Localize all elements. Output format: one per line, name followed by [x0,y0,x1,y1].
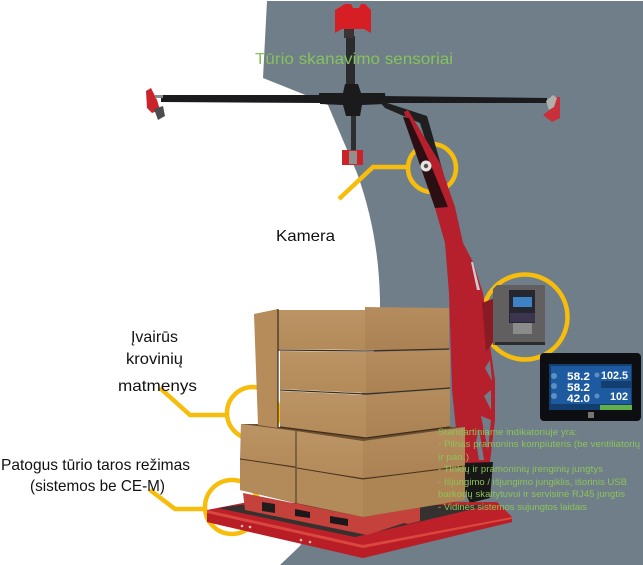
text block: indicator features: - Tinklų ir pramoninių įrenginių jungtys [438,464,603,475]
sensor frame [146,4,560,165]
text block: indicator features [438,427,640,513]
red column [404,110,495,468]
callout: load dimensions ring and leader [160,387,279,439]
text block: indicator features: - Išjungimo / išjungimo jungiklis, išorinis USB [438,477,627,488]
indicator cabinet [493,285,545,345]
callout: camera ring and leader [339,144,456,199]
screen readings: 102.5 [601,370,628,382]
screen readings: 58.2 [567,382,590,394]
callout: tare mode ring and leader [150,480,259,534]
label: tare mode: (sistemos be CE-M) [30,478,165,495]
lattice bracket [482,298,495,352]
lattice openings [476,360,492,460]
text block: indicator features: Standartiniame indikatoriuje yra: [438,427,577,438]
mast arms [161,36,547,150]
callout: indicator ring [482,274,568,360]
stacked cartons [240,307,465,517]
icon: left sensor [146,88,165,120]
label: load dimensions: matmenys [118,378,197,395]
grey background shape [263,1,643,565]
weighing platform [207,502,512,558]
icon: right sensor [543,95,560,122]
light slot [471,262,480,290]
touchscreen tablet [540,353,641,421]
label: tare mode [1,457,190,495]
pallet [243,493,420,535]
red column and arm [378,100,495,503]
screen readings: 58.2 [567,371,590,383]
label: load dimensions [118,329,197,395]
text block: indicator features: - Pilnas pramonins kompiuteris (be ventiliatorių [438,439,640,450]
label: tare mode: Patogus tūrio taros režimas [1,457,190,474]
text block: indicator features: barkodų skaitytuvui ir servisinė RJ45 jungtis [438,489,625,500]
lower carton stack [240,424,465,517]
heading: scanning sensors: Tūrio skanavimo sensoriai [255,51,453,68]
icon: camera lens [420,160,432,172]
column base [463,462,493,503]
screen readings: 102 [610,391,628,403]
screen readings [567,370,628,405]
black bracket [378,100,443,176]
label: load dimensions: krovinių [126,351,183,368]
carton backing [240,424,465,517]
text block: indicator features: - Vidinės sistemos sujungtos laidais [438,502,587,513]
label: camera: Kamera [276,228,335,245]
text block: indicator features: ir pan.) [438,452,469,463]
icon: top sensor [335,4,371,33]
icon: lower sensor [342,150,363,165]
label: load dimensions: Įvairūs [131,329,178,346]
upper carton stack [254,307,450,438]
screen readings: 42.0 [567,393,590,405]
dark inlay [403,117,448,208]
